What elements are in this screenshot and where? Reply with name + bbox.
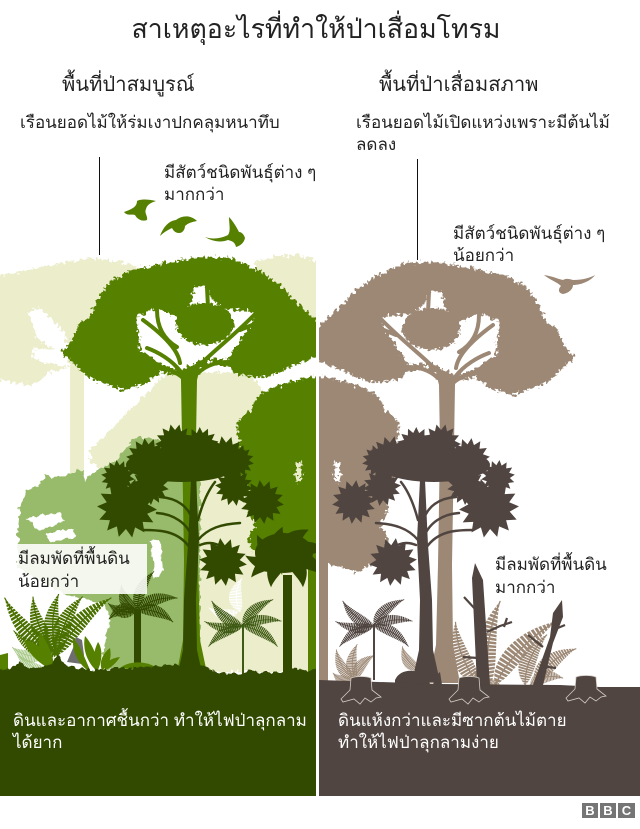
fern tree xyxy=(204,597,281,680)
orangutan xyxy=(67,637,84,664)
white wisps behind fern tree xyxy=(208,578,243,616)
label box: less ground wind: น้อยกว่า xyxy=(18,572,79,591)
text: intact canopy: เรือนยอดไม้ให้ร่มเงาปกคลุมหนาทึบ xyxy=(20,112,280,133)
tan fronds xyxy=(332,601,577,689)
callout line: intact canopy xyxy=(99,157,100,255)
pale background trees xyxy=(0,255,320,672)
text: more ground wind: มีลมพัดที่พื้นดิน xyxy=(495,552,607,574)
second canopy tree xyxy=(236,374,316,672)
white gap in light green tree xyxy=(151,540,163,580)
logo: BBC: B xyxy=(603,803,613,818)
heading: intact forest: พื้นที่ป่าสมบูรณ์ xyxy=(62,69,195,97)
text: moist soil: ได้ยาก xyxy=(11,732,62,752)
broken trunks xyxy=(395,563,565,685)
panel: intact forest scene xyxy=(0,255,330,796)
title: สาเหตุอะไรที่ทำให้ป่าเสื่อมโทรม xyxy=(131,10,501,45)
text: dry soil: ดินแห้งกว่าและมีซากต้นไม้ตาย xyxy=(338,710,567,730)
text: fewer species: มีสัตว์ชนิดพันธุ์ต่าง ๆ xyxy=(453,224,605,244)
fern tree xyxy=(335,597,412,680)
heading: degraded forest: พื้นที่ป่าเสื่อมสภาพ xyxy=(379,69,538,96)
white gap low in light green tree xyxy=(103,604,110,646)
logo: BBC xyxy=(582,803,635,818)
tan second tree xyxy=(319,374,400,680)
label box: less ground wind xyxy=(17,544,147,594)
palm centre xyxy=(107,570,178,672)
ground band xyxy=(0,698,316,796)
light green tree xyxy=(18,438,200,668)
text: degraded canopy: ลดลง xyxy=(356,135,396,154)
tan canopy tree xyxy=(306,262,574,683)
logo: BBC: C xyxy=(622,803,632,818)
tree stumps xyxy=(341,676,606,704)
text: dry soil: ทำให้ไฟป่าลุกลามง่าย xyxy=(338,732,499,753)
ghost fronds xyxy=(12,646,44,668)
text: fewer species: น้อยกว่า xyxy=(453,246,514,265)
icon: three green birds xyxy=(124,200,245,247)
forest floor xyxy=(0,655,316,676)
text: more ground wind: มากกว่า xyxy=(495,578,555,597)
text: degraded canopy: เรือนยอดไม้เปิดแหว่งเพราะมีต้นไม้ xyxy=(356,112,610,132)
palm right xyxy=(245,527,316,672)
broad leaf plants xyxy=(0,632,162,672)
text: moist soil: ดินและอากาศชื้นกว่า ทำให้ไฟป่าลุกลาม xyxy=(13,708,307,731)
callout line: degraded canopy xyxy=(417,159,418,260)
text: more species: มากกว่า xyxy=(164,185,224,204)
panel: degraded forest scene xyxy=(306,262,640,796)
text: more species: มีสัตว์ชนิดพันธุ์ต่าง ๆ xyxy=(164,163,316,183)
dark tree xyxy=(330,424,520,682)
icon: tan bird xyxy=(544,275,595,294)
logo: BBC: B xyxy=(585,803,595,818)
big fern xyxy=(1,594,112,659)
ground xyxy=(319,680,640,796)
label box: less ground wind: มีลมพัดที่พื้นดิน xyxy=(18,546,130,568)
main canopy tree xyxy=(62,257,330,678)
understory dark tree xyxy=(96,424,286,682)
